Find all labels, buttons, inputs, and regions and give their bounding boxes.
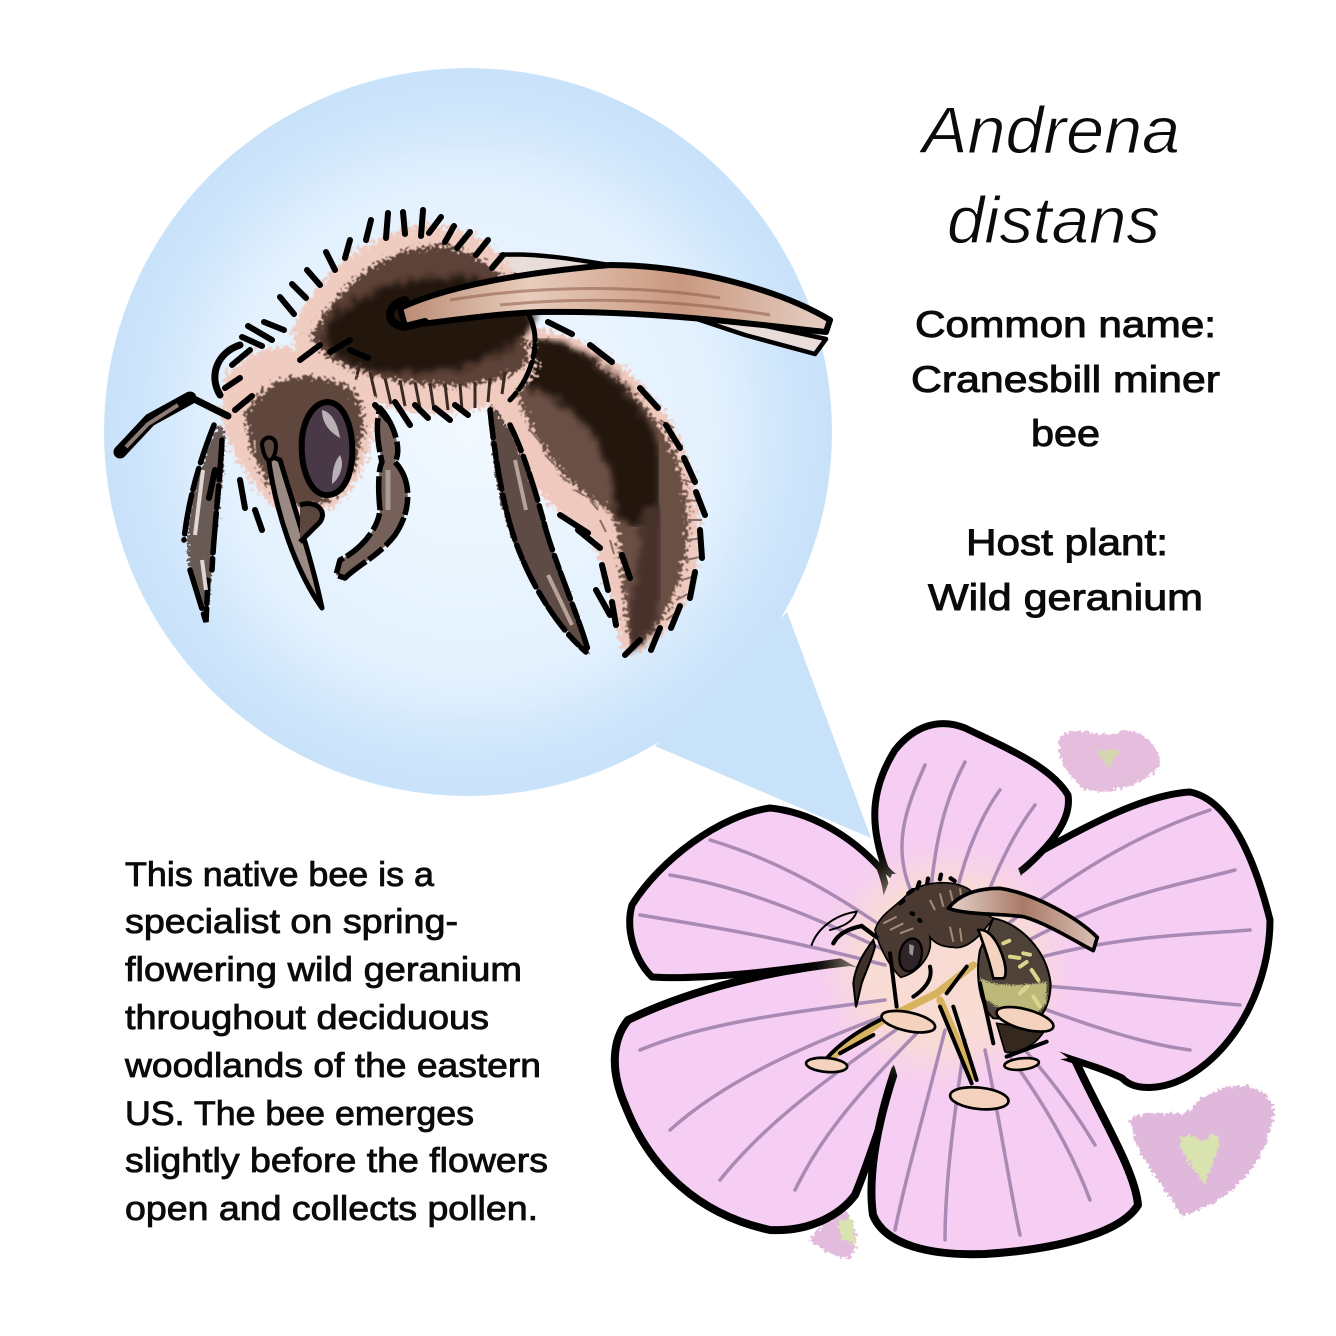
- petal right: [1008, 792, 1270, 1087]
- small bee wing: [948, 888, 1097, 951]
- ghost antenna ring: [812, 912, 857, 945]
- thorax: [292, 226, 540, 413]
- description text: slightly before the flowers: [125, 1142, 548, 1180]
- large bee illustration: [120, 210, 830, 655]
- flower centre cover: [840, 868, 1068, 1085]
- description text: throughout deciduous: [125, 999, 489, 1037]
- head outline stroke: [215, 345, 240, 395]
- petal upper left: [630, 808, 888, 978]
- rear wing: [500, 254, 826, 354]
- names block: Wild geranium: [928, 577, 1203, 618]
- proboscis: [262, 437, 322, 608]
- small bee antenna: [833, 926, 877, 943]
- names block: bee: [1031, 413, 1100, 454]
- genus: Andrena: [918, 93, 1180, 167]
- front leg left: [184, 425, 224, 622]
- petal top: [875, 724, 1068, 892]
- small bee eye: [896, 936, 925, 974]
- abdomen: [485, 325, 702, 654]
- flower: [615, 724, 1270, 1254]
- compound eye: [302, 402, 352, 495]
- description text: specialist on spring-: [125, 903, 458, 941]
- petal bottom: [871, 1031, 1138, 1254]
- fallen petal lower right: [1130, 1086, 1274, 1216]
- species: distans: [947, 183, 1160, 257]
- abdomen hair streaks: [530, 420, 702, 620]
- thorax belly hair: [356, 362, 505, 410]
- background petals: [810, 731, 1274, 1258]
- pollen glow: [840, 865, 1050, 1065]
- description text: This native bee is a: [125, 856, 434, 894]
- fallen petal top right: [1059, 731, 1160, 791]
- names block: [911, 304, 1220, 618]
- description text: flowering wild geranium: [125, 951, 522, 989]
- head: [222, 347, 378, 522]
- description text: woodlands of the eastern: [124, 1047, 541, 1085]
- names block: Common name:: [915, 304, 1216, 345]
- small bee abdomen: [978, 918, 1051, 1052]
- description text: open and collects pollen.: [125, 1190, 538, 1228]
- small bee fur highlights: [883, 888, 962, 942]
- black bristles: [209, 210, 705, 655]
- forewing: [390, 265, 830, 332]
- hind leg: [490, 405, 590, 655]
- small bee bristles: [900, 875, 955, 921]
- petal veins: [640, 762, 1250, 1240]
- antenna: [120, 398, 228, 452]
- thorax-abdomen seam: [510, 312, 535, 400]
- names block: Cranesbill miner: [911, 359, 1220, 400]
- description text: US. The bee emerges: [125, 1095, 474, 1133]
- description text: [124, 856, 548, 1228]
- small bee feet: [805, 930, 1056, 1112]
- names block: Host plant:: [966, 522, 1168, 563]
- fallen petal bottom: [810, 1208, 856, 1258]
- petal lower left: [615, 962, 908, 1230]
- middle leg: [336, 408, 408, 578]
- title: [918, 93, 1180, 257]
- black leg lines: [827, 953, 1047, 1083]
- small bee front leg: [853, 940, 875, 1007]
- speech bubble: [104, 68, 871, 838]
- small bee: [805, 875, 1097, 1112]
- small bee thorax and head: [875, 883, 993, 977]
- yellow legs: [830, 965, 973, 1077]
